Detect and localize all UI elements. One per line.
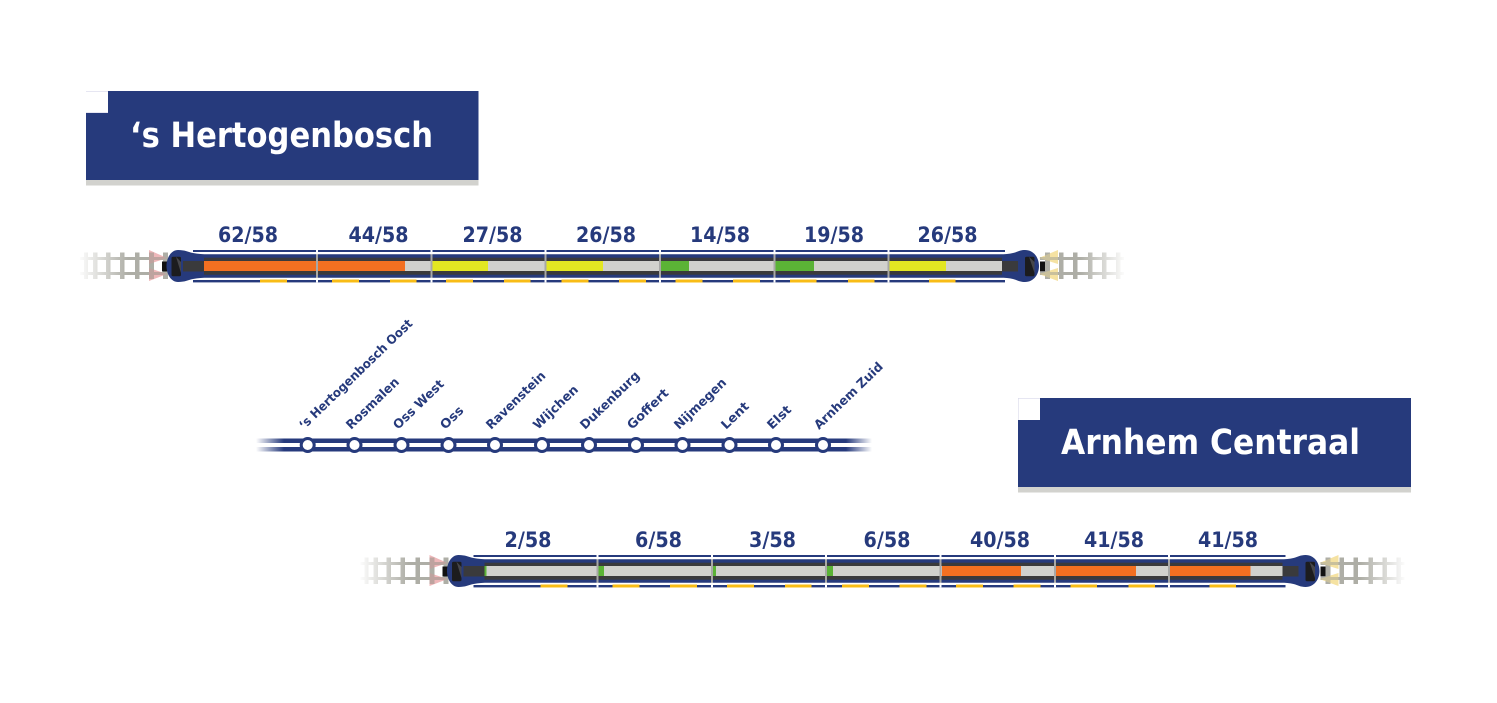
occupancy labels: 6/58	[635, 528, 682, 553]
occupancy bars	[484, 566, 1250, 576]
station names: Lent	[718, 398, 752, 432]
occupancy labels	[218, 223, 978, 248]
route line with stations	[256, 316, 886, 452]
heading: 's Hertogenbosch: ‘s Hertogenbosch	[130, 116, 433, 156]
occupancy labels: 3/58	[749, 528, 796, 553]
station names: Ravenstein	[483, 368, 548, 432]
heading: 's Hertogenbosch	[86, 91, 478, 186]
occupancy labels: 41/58	[1198, 528, 1258, 553]
station names: Oss West	[390, 376, 447, 432]
door markers	[540, 584, 1236, 588]
station names: Nijmegen	[671, 375, 729, 432]
station names: Goffert	[624, 385, 672, 432]
occupancy labels: 27/58	[462, 223, 522, 248]
occupancy labels: 6/58	[864, 528, 910, 553]
occupancy labels: 14/58	[690, 223, 750, 248]
station names: Wijchen	[530, 382, 581, 432]
occupancy labels: 40/58	[970, 528, 1030, 553]
station names: Rosmalen	[343, 374, 402, 432]
occupancy labels	[504, 528, 1258, 553]
heading: Arnhem Centraal: Arnhem Centraal	[1061, 423, 1360, 463]
station names	[296, 316, 886, 432]
train: Arnhem Centraal departure occupancy	[360, 528, 1404, 588]
occupancy labels: 2/58	[504, 528, 552, 553]
station names: ‘s Hertogenbosch Oost	[296, 316, 415, 432]
station names: Arnhem Zuid	[811, 359, 886, 432]
occupancy labels: 62/58	[218, 223, 278, 248]
heading: Arnhem Centraal	[1018, 398, 1411, 492]
occupancy labels: 26/58	[918, 223, 978, 248]
occupancy labels: 19/58	[804, 223, 864, 248]
door markers	[260, 280, 956, 282]
train: 's Hertogenbosch departure occupancy	[80, 223, 1124, 282]
occupancy labels: 41/58	[1084, 528, 1144, 553]
station names: Oss	[437, 403, 467, 432]
occupancy labels: 26/58	[576, 223, 636, 248]
occupancy labels: 44/58	[348, 223, 408, 248]
occupancy bars	[204, 261, 946, 271]
station names: Elst	[764, 402, 794, 432]
station names: Dukenburg	[577, 368, 642, 432]
